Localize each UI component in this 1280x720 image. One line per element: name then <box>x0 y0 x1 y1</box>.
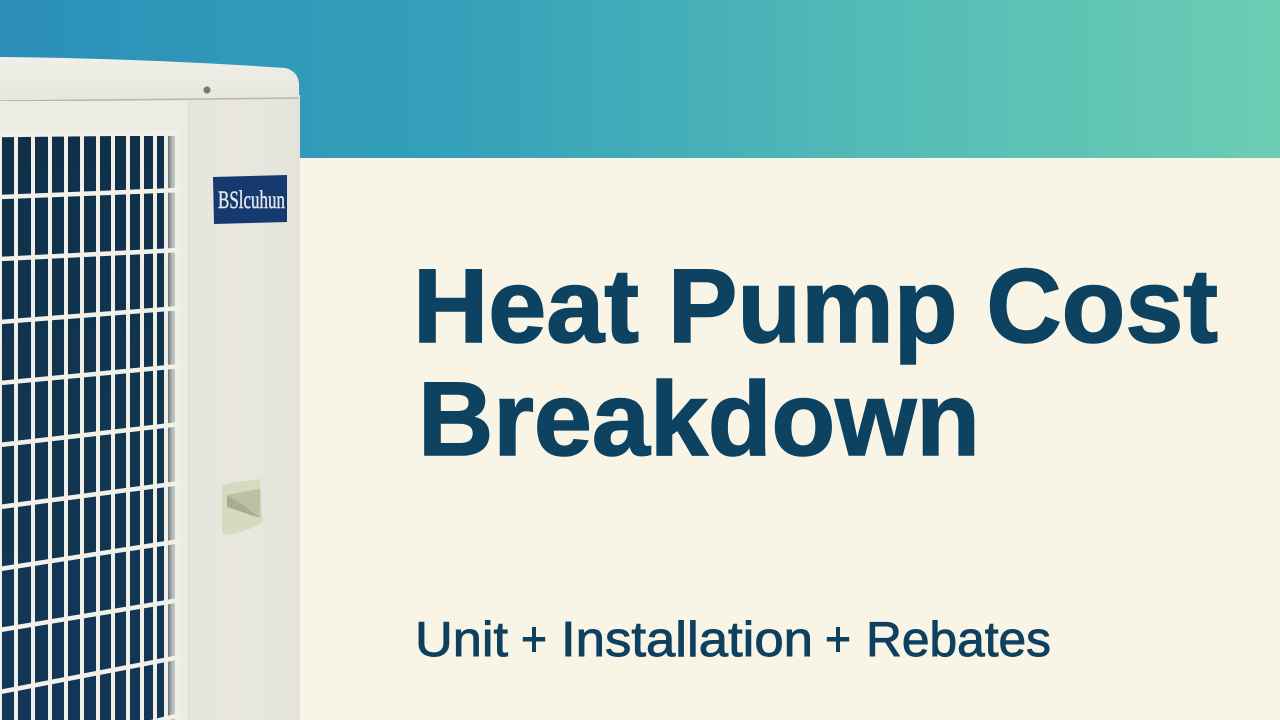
unit side panel <box>0 95 300 720</box>
grille frame <box>0 101 189 720</box>
subtitle: + <box>521 613 547 667</box>
header gradient band <box>0 0 1280 158</box>
lid screw <box>204 86 210 94</box>
subtitle: Installation <box>561 613 813 667</box>
subtitle: Unit <box>415 613 508 667</box>
title <box>413 248 1218 478</box>
brand badge <box>213 175 287 224</box>
subtitle: Rebates <box>866 613 1051 667</box>
grille <box>0 133 180 720</box>
light inner edge <box>166 136 178 720</box>
title: Heat Pump Cost <box>413 248 1218 365</box>
dark mesh behind grille <box>0 136 178 720</box>
heat pump unit illustration <box>0 57 300 720</box>
brand badge: BSlcuhun <box>218 187 285 214</box>
unit top lid <box>0 57 299 101</box>
subtitle: + <box>825 613 851 667</box>
handle recess <box>222 479 263 535</box>
title: Breakdown <box>418 361 980 478</box>
